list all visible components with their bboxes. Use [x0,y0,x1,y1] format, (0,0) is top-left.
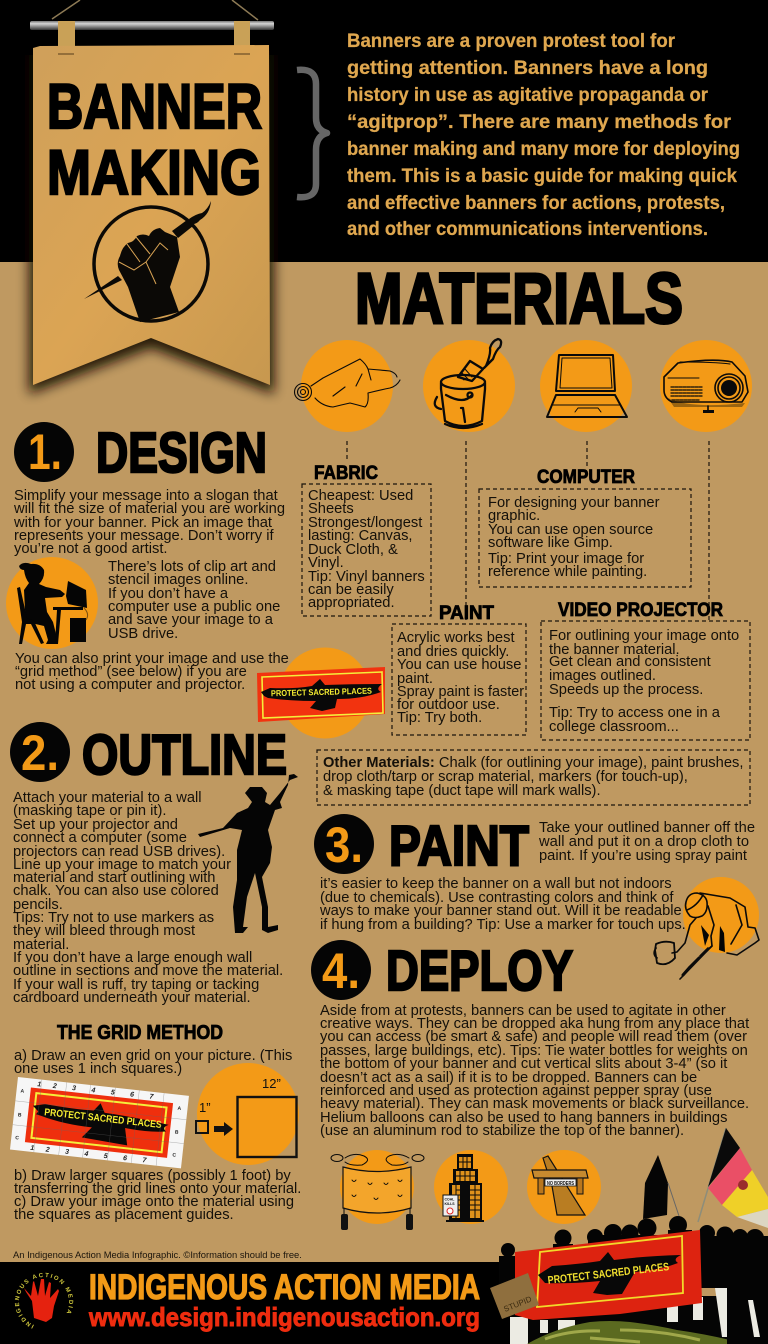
grid method panel [10,1022,301,1223]
panel: paint: You can use house [397,657,521,673]
intro text: history in use as agitative propaganda or [347,84,708,106]
header black band [0,0,768,262]
intro text: Banners are a proven protest tool for [347,30,675,52]
outline body text: If you don’t have a large enough wall [13,950,252,966]
design body text [13,488,289,693]
outline body text: cardboard underneath your material. [13,990,251,1006]
panel: paint: Acrylic works best [397,630,515,646]
panel: paint: Tip: Try both. [397,710,482,726]
panel: computer: For designing your banner [488,495,660,511]
panel: fabric: FABRIC [314,463,378,484]
panel: computer: You can use open source [488,522,653,538]
photo: people holding banner: STUPID [502,1294,533,1314]
hanging banner title [29,0,274,394]
grid banner picture: C [15,1135,20,1141]
outline body text: material and start outlining with [13,870,215,886]
panel: computer [479,467,691,587]
icon: fabric [294,340,400,432]
icon: overpass banner [527,1150,601,1224]
paint body text: (due to chemicals). Use contrasting colors and think of [320,890,674,906]
panel: other materials: drop cloth/tarp or scrap material, markers (for touch-up), [323,769,688,785]
section 3 heading: paint [314,814,529,878]
footer url: www.design.indigenousaction.org [88,1302,480,1332]
grid banner picture: 1 2 3 4 5 6 7 [30,1145,148,1165]
logo: red hand: INDIGENOUS ACTION MEDIA [14,1272,74,1329]
panel: paint [392,603,526,735]
outline body text: Set up your projector and [13,817,178,833]
panel: paint: and dries quickly. [397,644,509,660]
design body text: Simplify your message into a slogan that [14,488,278,504]
panel: video projector: Tip: Try to access one in a [549,705,721,721]
deploy body text [320,1003,749,1139]
outline body text [13,790,283,1006]
panel: fabric: appropriated. [308,595,395,611]
panel: video projector: VIDEO PROJECTOR [558,600,723,621]
panel: fabric: Duck Cloth, & [308,542,398,558]
section 1 heading: design: DESIGN [96,421,267,485]
panel: paint: for outdoor use. [397,697,500,713]
hanging banner title: MAKING [47,138,261,208]
orange circle with squares diagram [196,1063,299,1165]
panel: fabric: Tip: Vinyl banners [308,569,425,585]
icon: laptop [540,340,632,432]
brace [297,70,327,197]
grid method panel: transferring the grid lines onto your material. [14,1181,301,1197]
icon: building with sign [434,1150,508,1224]
deploy body text: doesn’t act as a sail) if it is to be dropped. Banners can be [320,1070,697,1086]
mini banner: protect sacred places [257,648,385,738]
grid method panel: a) Draw an even grid on your picture. (This [14,1048,292,1064]
outline body text: Line up your image to match your [13,857,231,873]
icon: person outlining [198,774,298,933]
icon: fist with paintbrush [84,201,211,322]
section 3 heading: paint: PAINT [389,814,529,878]
section 4 heading: deploy [311,939,573,1003]
deploy body text: (use an aluminum rod to stabilize the top of the banner). [320,1123,684,1139]
icon: person painting on ground [654,877,759,979]
intro text: and effective banners for actions, protests, [347,192,725,214]
panel: video projector: For outlining your image onto [549,628,739,644]
intro text [347,30,740,240]
photo: people holding banner [490,1128,768,1344]
deploy body text: heavy material). They can mask movements or black surveillance. [320,1096,749,1112]
outline body text: If your wall is ruff, try taping or tacking [13,977,259,993]
grid banner picture: C [172,1152,177,1159]
design body text: not using a computer and projector. [15,677,245,693]
panel: video projector: college classroom... [549,719,679,735]
paint body text: ways to make your banner stand out. Will it be readable [319,903,682,919]
panel: fabric: Cheapest: Used [308,488,413,504]
design body text: and save your image to a [108,612,274,628]
section 2 heading: outline [10,722,287,787]
panel: computer: reference while painting. [488,564,647,580]
panel: fabric: lasting: Canvas, [308,528,412,544]
grid banner picture: A [177,1106,182,1112]
design body text: stencil images online. [108,572,248,588]
grid method panel: THE GRID METHOD [57,1022,223,1044]
deploy body text: Helium balloons can also be used to hang banners in buildings [320,1110,727,1126]
outline body text: outline in sections and move the material. [13,963,283,979]
outline body text: material. [13,937,69,953]
outline body text: (masking tape or pin it). [13,803,166,819]
mini banner: protect sacred places: PROTECT SACRED PLACES [271,686,372,698]
panel: other materials: & masking tape (duct tape will mark walls). [323,783,601,799]
intro text: “agitprop”. There are many methods for [347,111,731,133]
grid method panel: b) Draw larger squares (possibly 1 foot) by [14,1168,291,1184]
materials heading: MATERIALS [355,260,683,339]
paint body text: if hung from a building? Tip: Use a marker for touch ups. [320,917,686,933]
paint body text [319,820,755,933]
deploy body text: creative ways. They can be dropped aka hung from any place that [320,1016,749,1032]
deploy body text: the bottom of your banner and cut vertical slits about 3-4” (so it [320,1056,727,1072]
section 2 heading: outline: 2. [21,725,59,781]
intro text: and other communications interventions. [347,218,708,240]
design body text: represents your message. Don’t worry if [14,528,274,544]
panel: video projector [541,600,750,740]
panel: video projector: the banner material. [549,642,680,658]
design body text: If you don’t have a [108,586,229,602]
deploy body text: passes, large buildings, etc). Tips: Tie water bottles for weights on [320,1043,748,1059]
panel: fabric: Vinyl. [308,555,344,571]
grid banner picture: 1 2 3 4 5 6 7 [37,1081,155,1101]
icon: person at computer [6,557,98,649]
icon: overpass banner: NO BORDERS [547,1181,575,1187]
paint body text: Take your outlined banner off the [539,820,755,836]
panel: fabric: can be easily [308,582,394,598]
outline body text: chalk. You can also use colored [13,883,219,899]
grid banner picture: A [20,1088,25,1095]
panel: video projector: images outlined. [549,668,656,684]
intro text: banner making and many more for deploying [347,138,740,160]
paint body text: wall and put it on a drop cloth to [538,834,749,850]
panel: computer: graphic. [488,508,540,524]
panel: paint: paint. [397,671,433,687]
paint body text: it’s easier to keep the banner on a wall but not indoors [320,876,672,892]
design body text: “grid method” (see below) if you are [15,664,247,680]
footer black band [0,1262,520,1344]
panel: fabric: Strongest/longest [308,515,422,531]
deploy body text: Aside from at protests, banners can be used to agitate in other [320,1003,726,1019]
panel: computer: COMPUTER [537,467,635,488]
panel: video projector: Speeds up the process. [549,682,703,698]
footer organisation title: INDIGENOUS ACTION MEDIA [89,1268,480,1307]
section 4 heading: deploy: 4. [322,943,360,999]
orange circle with squares diagram: 1” [199,1100,211,1115]
icon: building with sign: KILLS [444,1202,455,1206]
grid banner picture [10,1077,189,1168]
grid method panel: the squares as placement guides. [14,1207,234,1223]
section 3 heading: paint: 3. [325,817,363,873]
hanging banner title: BANNER [47,72,262,142]
panel: computer: software like Gimp. [488,535,613,551]
outline body text: Tips: Try not to use markers as [13,910,214,926]
grid banner picture: B [17,1112,22,1119]
panel: computer: Tip: Print your image for [488,551,644,567]
panel: paint: PAINT [439,603,494,624]
grid banner picture: PROTECT SACRED PLACES [44,1107,162,1131]
outline body text: projectors can read USB drives). [13,844,225,860]
icon: banner with balloons and bottles [331,1150,424,1230]
design body text: computer use a public one [108,599,280,615]
outline body text: pencils. [13,897,63,913]
icon: video projector [660,340,752,432]
panel: video projector: Get clean and consistent [549,654,711,670]
grid method panel: c) Draw your image onto the material using [14,1194,294,1210]
panel: paint: Spray paint is faster [397,684,524,700]
section 1 heading: design [14,421,267,485]
outline body text: Attach your material to a wall [13,790,202,806]
panel: other materials [317,750,750,805]
design body text: with for your banner. Pick an image that [13,515,272,531]
section 2 heading: outline: OUTLINE [82,723,287,787]
intro text: getting attention. Banners have a long [347,57,708,79]
section 1 heading: design: 1. [28,424,62,480]
panel: other materials: Other Materials: Chalk (for outlining your image), paint brushes, [323,755,743,771]
design body text: There’s lots of clip art and [108,559,276,575]
grid method panel: one uses 1 inch squares.) [14,1061,182,1077]
design body text: You can also print your image and use the [15,651,289,667]
grid banner picture: B [175,1130,179,1136]
deploy body text: reinforced and used as protection against pepper spray (use [320,1083,712,1099]
deploy body text: you can access (be smart & safe) and people will read them (over [320,1029,747,1045]
section 4 heading: deploy: DEPLOY [386,939,573,1003]
panel: fabric [302,463,431,616]
paint body text: paint. If you’re using spray paint [539,848,747,864]
icon: building with sign: COAL [444,1198,455,1202]
design body text: USB drive. [108,626,178,642]
credit line: An Indigenous Action Media Infographic. ©Information should be free. [13,1249,302,1260]
photo: people holding banner: PROTECT SACRED PLACES [547,1261,670,1287]
intro text: them. This is a basic guide for making quick [347,165,737,187]
panel: fabric: Sheets [308,501,354,517]
outline body text: they will bleed through most [13,923,195,939]
icon: paint can and brush [423,339,515,432]
outline body text: connect a computer (some [13,830,187,846]
design body text: will fit the size of material you are working [13,501,285,517]
orange circle with squares diagram: 12” [262,1076,281,1091]
design body text: you’re not a good artist. [14,541,168,557]
